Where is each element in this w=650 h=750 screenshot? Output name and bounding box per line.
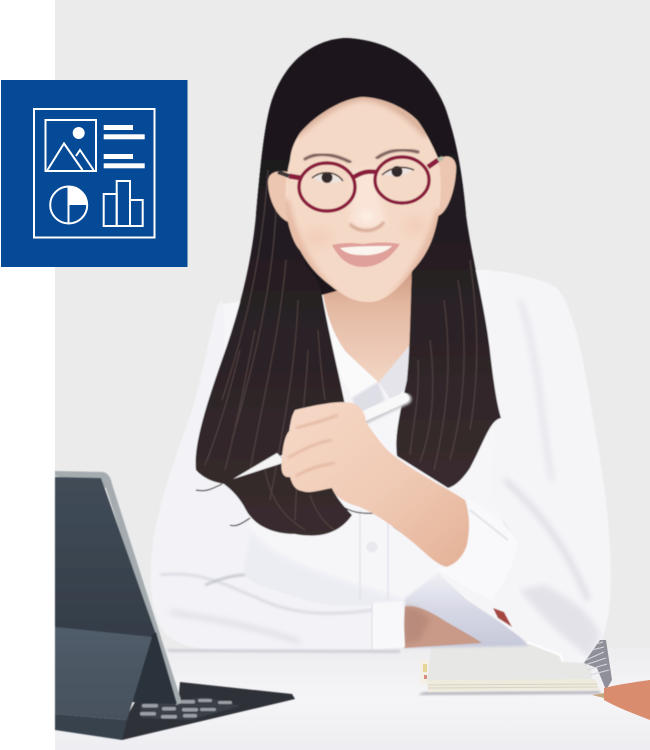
neck: [320, 262, 412, 384]
cuff tear: [493, 608, 512, 627]
hair: [196, 38, 501, 540]
pen: [233, 398, 406, 479]
report icon box: [1, 80, 188, 267]
eyes: [313, 173, 342, 183]
shirt cuff: [434, 498, 518, 600]
crown of head: [256, 38, 466, 295]
arm and fingers: [281, 402, 469, 567]
placket and button: [360, 510, 388, 600]
cover page: [427, 644, 592, 681]
mouth: [332, 242, 400, 267]
glasses: [289, 157, 438, 211]
background panel: [55, 0, 650, 650]
woman: [151, 38, 611, 663]
face: [268, 96, 456, 302]
icon: report page: [34, 109, 154, 238]
chest shading: [240, 530, 405, 640]
tablet: [55, 471, 295, 740]
left hair lock: [196, 100, 352, 536]
shirt left arm: [151, 300, 405, 652]
shirt right shoulder and sleeve: [440, 270, 611, 663]
shirt torso: [190, 270, 520, 648]
forearm and hand: [233, 398, 518, 600]
table top: [55, 648, 650, 750]
sticky tabs: [420, 660, 428, 684]
tablet keyboard: [122, 682, 295, 740]
hair wisp below arm: [393, 522, 413, 540]
icon: bar chart: [104, 181, 143, 226]
icon: picture: [46, 120, 96, 171]
spiral binding: [584, 640, 612, 690]
icon: text lines: [104, 125, 145, 168]
notebook: [418, 644, 600, 695]
face shape: [285, 97, 441, 302]
page edges: [427, 679, 600, 692]
tablet screen back: [55, 477, 158, 640]
tablet hinge: [130, 632, 177, 704]
hair strands: [205, 170, 477, 530]
face shading: [285, 96, 440, 300]
ears: [268, 171, 288, 222]
tablet stand panel: [55, 627, 152, 720]
nose: [350, 170, 386, 231]
hair behind neck: [256, 38, 466, 330]
cheeks: [304, 229, 332, 247]
orange notebook: [604, 680, 650, 720]
table shadow under arm: [165, 649, 400, 653]
eyebrows: [305, 154, 350, 162]
shirt: [151, 270, 611, 663]
other hand: [404, 606, 482, 648]
tablet bezel: [55, 471, 182, 705]
icon: pie chart: [50, 186, 87, 224]
tablet base fold: [55, 714, 127, 740]
right hair lock: [396, 100, 501, 488]
shirt collar: [320, 288, 412, 425]
